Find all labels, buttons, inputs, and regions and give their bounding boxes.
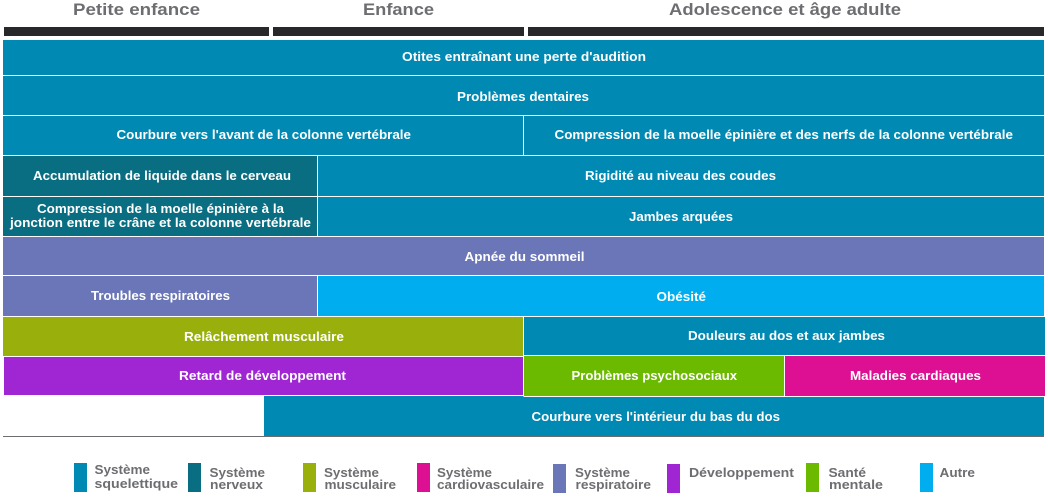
legend item: Système nerveux: Système (210, 466, 265, 480)
bar: Obésité (318, 276, 1044, 316)
bar: Douleurs au dos et aux jambes (524, 317, 1045, 355)
legend item: Système squelettique: Système (94, 463, 150, 477)
legend item: Système squelettique (74, 463, 178, 492)
legend item: Système musculaire: musculaire (324, 478, 396, 492)
bar: Apnée du sommeil (3, 237, 1044, 275)
bar: Maladies cardiaques: Maladies cardiaques (850, 369, 981, 383)
legend item: Développement: Développement (689, 466, 795, 480)
bar: Problèmes psychosociaux (524, 356, 784, 396)
header: Petite enfance (4, 0, 269, 36)
bar: Retard de développement (4, 357, 523, 395)
legend item: Système musculaire (303, 463, 396, 492)
legend item: Système respiratoire: Système (575, 466, 630, 480)
bar: Relâchement musculaire: Relâchement musculaire (184, 330, 344, 344)
legend item: Santé mentale (806, 463, 883, 492)
legend item: Système squelettique: squelettique (94, 477, 178, 491)
bar: Courbure vers l'intérieur: Courbure vers l'intérieur du bas du dos (532, 410, 780, 424)
bar: Problèmes psychosociaux: Problèmes psychosociaux (572, 369, 737, 383)
legend item: Système respiratoire (553, 464, 651, 493)
bar: Apnée du sommeil: Apnée du sommeil (464, 250, 584, 264)
bar: Douleurs au dos et aux jambes: Douleurs au dos et aux jambes (688, 329, 885, 343)
legend item: Système respiratoire: respiratoire (576, 478, 651, 492)
bar: Problèmes dentaires: Problèmes dentaires (457, 90, 589, 104)
bar: Rigidité: Rigidité au niveau des coudes (585, 169, 776, 183)
bar: Relâchement musculaire (3, 317, 523, 356)
bar: Troubles respiratoires: Troubles respiratoires (91, 289, 230, 303)
bar: Compression de la moelle et des nerfs (524, 116, 1044, 155)
legend item: Autre (920, 463, 975, 492)
bar: Retard de développement: Retard de développement (179, 369, 347, 383)
bar: Accumulation de liquide (3, 156, 317, 196)
bar: Compression à la jonction: Compression de la moelle épinière à la (37, 202, 285, 216)
legend item: Autre: Autre (940, 466, 975, 480)
header: Enfance: Enfance (363, 0, 434, 19)
header: Adolescence et âge adulte (528, 0, 1044, 36)
bar: Rigidité (318, 156, 1044, 196)
legend item: Système cardiovasculaire (417, 463, 544, 492)
bar: Otites: Otites entraînant une perte d'audition (402, 50, 646, 64)
bar: Accumulation de liquide: Accumulation de liquide dans le cerveau (33, 169, 291, 183)
bar: Jambes arquées (318, 197, 1044, 236)
bar: Problèmes dentaires (3, 76, 1044, 115)
bar: Courbure vers l'intérieur (264, 396, 1044, 436)
bar: Obésité: Obésité (656, 290, 706, 304)
bar: Jambes arquées: Jambes arquées (629, 210, 733, 224)
bar: Otites (3, 40, 1044, 75)
bar: Troubles respiratoires (3, 276, 317, 316)
header: Petite enfance: Petite enfance (73, 0, 200, 19)
bar: Compression de la moelle et des nerfs: Compression de la moelle épinière et des nerfs de la colonne vertébrale (554, 128, 1013, 142)
bar: Maladies cardiaques (785, 356, 1045, 396)
legend item: Système cardiovasculaire: Système (437, 466, 492, 480)
header: Enfance (273, 0, 524, 36)
legend item: Santé mentale: mentale (829, 478, 883, 492)
legend item: Système nerveux (188, 463, 265, 492)
legend item: Système nerveux: nerveux (210, 478, 263, 492)
bar: Courbure vers l'avant (3, 116, 523, 155)
legend item: Développement (667, 464, 795, 493)
header: Adolescence et âge adulte: Adolescence et âge adulte (669, 0, 901, 19)
legend item: Système musculaire: Système (324, 466, 379, 480)
legend item: Santé mentale: Santé (828, 466, 866, 480)
bar: Compression à la jonction: jonction entre le crâne et la colonne vertébrale (9, 216, 311, 230)
legend item: Système cardiovasculaire: cardiovasculaire (437, 478, 544, 492)
bar: Compression à la jonction (3, 197, 317, 236)
bar: Courbure vers l'avant: Courbure vers l'avant de la colonne vertébrale (116, 128, 411, 142)
legend (74, 463, 975, 493)
